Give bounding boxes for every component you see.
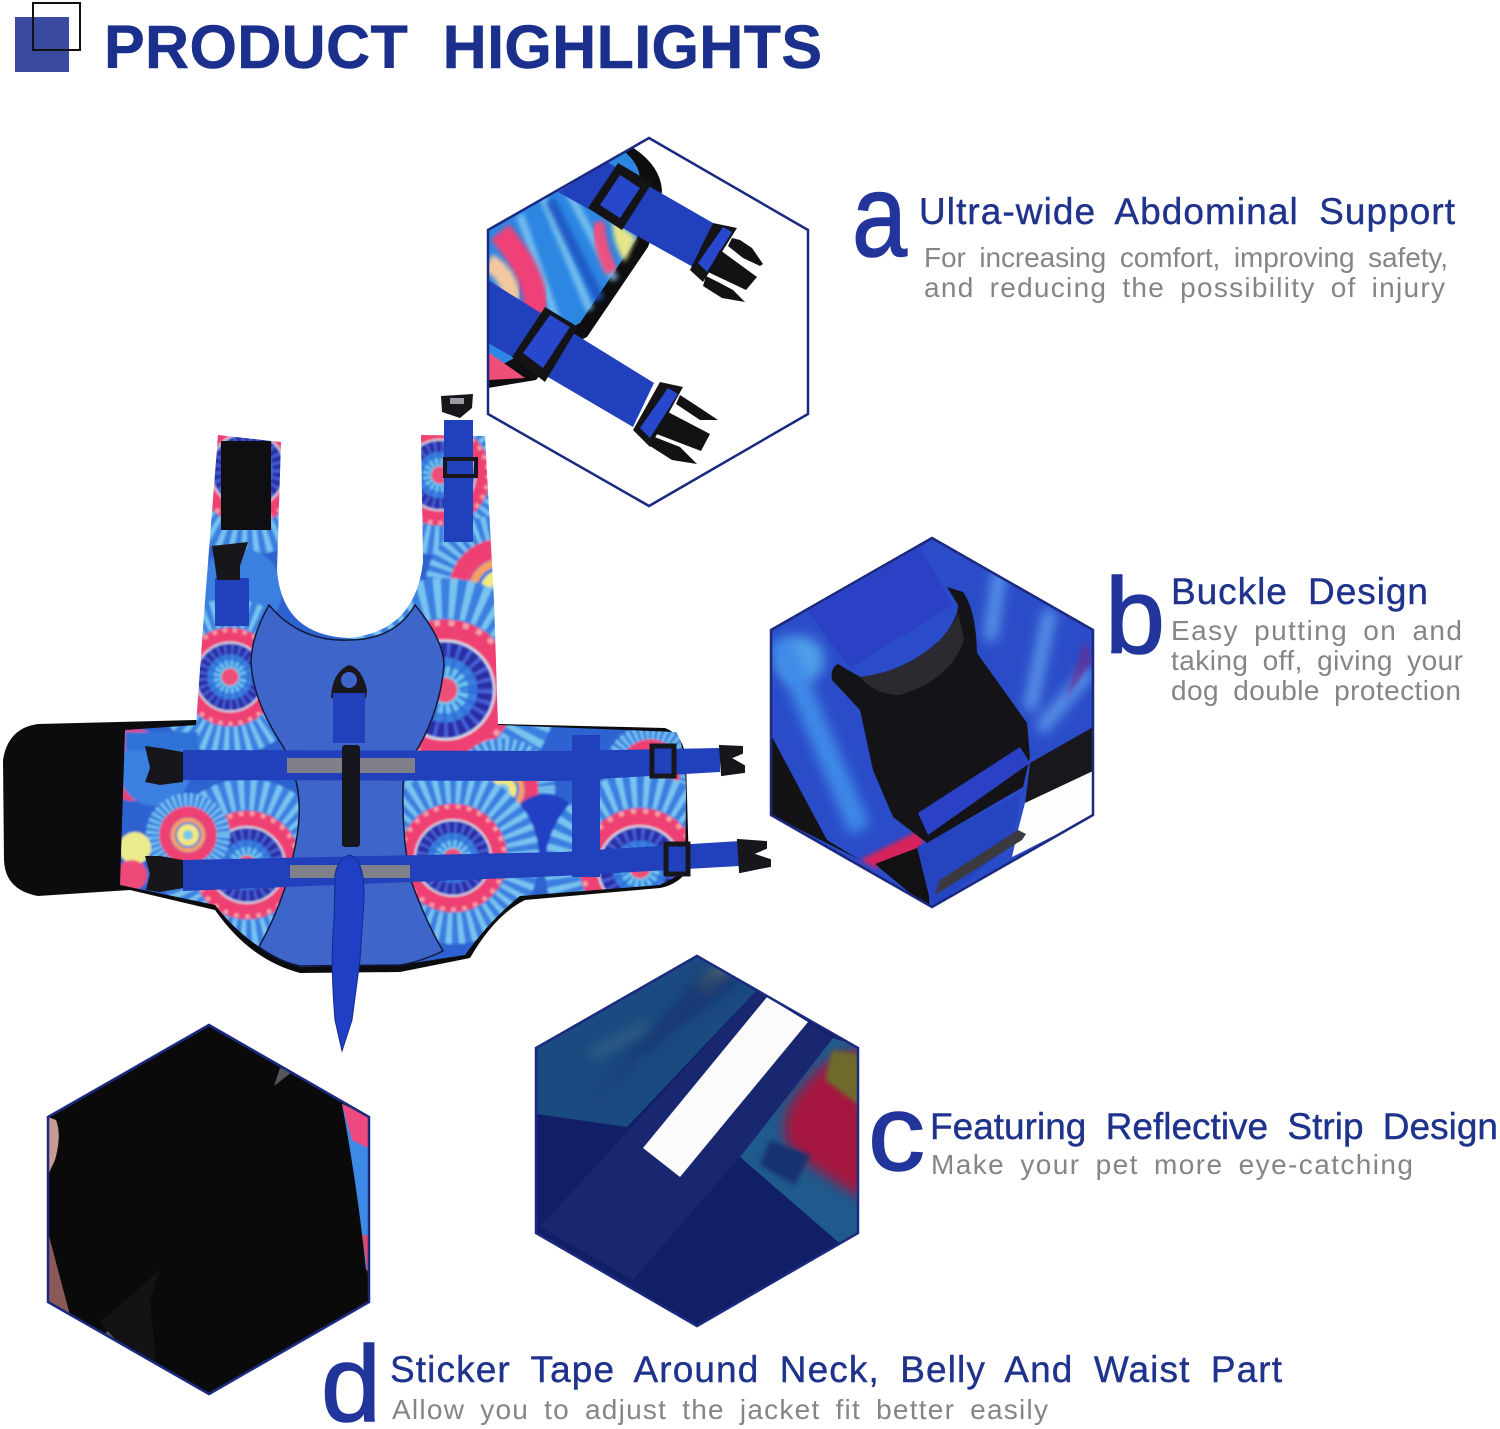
callout d: sticker tape: Allow you to adjust the jacket fit better easily [392,1394,1048,1425]
hexagon photo b: buckle close-up [771,538,1095,910]
buckle strap end [918,747,1030,835]
right shoulder strap and buckle [441,394,476,542]
callout a: ultra-wide abdominal support: For increasing comfort, improving safety, [924,242,1448,273]
callout b: buckle design: dog double protection [1171,675,1461,706]
muted dye right [740,1038,865,1242]
black edge, red trim and white backdrop [771,735,860,860]
callout c: reflective strip design: c [868,1072,925,1193]
callout d: sticker tape [321,1323,1283,1429]
D-ring and webbing [331,665,367,743]
left buckles [145,746,183,892]
upper belly strap [183,748,720,781]
muted dye top-left [530,950,757,1127]
strap sliders [512,163,737,447]
lower webbing [917,793,1020,907]
handle [342,745,360,847]
central blue panel [251,605,444,966]
navy lower panel [740,1157,838,1242]
tail fin [332,855,364,1051]
black belly backing [3,720,689,973]
callout a: ultra-wide abdominal support [852,150,1456,303]
navy webbing [540,990,833,1280]
lower strap [488,280,654,427]
tie-dye fabric [488,152,640,372]
callout c: reflective strip design: Make your pet more eye-catching [931,1149,1413,1180]
upper webbing [808,547,953,668]
callout b: buckle design: Buckle Design [1171,571,1428,612]
callout c: reflective strip design [868,1072,1498,1193]
callout b: buckle design: b [1105,555,1165,676]
reflective strips [287,758,415,878]
callout d: sticker tape: Sticker Tape Around Neck, Belly And Waist Part [390,1349,1283,1390]
callout a: ultra-wide abdominal support: Ultra-wide Abdominal Support [919,191,1456,232]
callout b: buckle design: taking off, giving your [1171,645,1463,676]
hexagon photo c: reflective strip [530,950,865,1326]
hexagon photo a: abdominal straps [488,138,808,506]
hexagon photo d: sticker tape [48,1025,372,1394]
header icon: overlapping squares [15,3,80,72]
callout b: buckle design [1105,555,1463,706]
vertical strap [572,735,600,877]
callout a: ultra-wide abdominal support: and reducing the possibility of injury [924,272,1445,303]
title: PRODUCT HIGHLIGHTS [104,13,822,81]
lower belly strap [183,841,740,891]
callout a: ultra-wide abdominal support: a [852,150,907,282]
plastic buckle [832,587,1030,843]
callout b: buckle design: Easy putting on and [1171,615,1462,646]
black edging [488,147,662,388]
vest illustration [3,385,770,1051]
left shoulder velcro and buckle [212,441,271,626]
buckle prongs [650,238,763,464]
callout c: reflective strip design: Featuring Reflective Strip Design [930,1106,1498,1147]
tie-dye fabric [120,435,686,967]
upper strap [558,162,713,267]
white reflective strip [643,997,808,1177]
right buckles and sliders [652,746,770,874]
